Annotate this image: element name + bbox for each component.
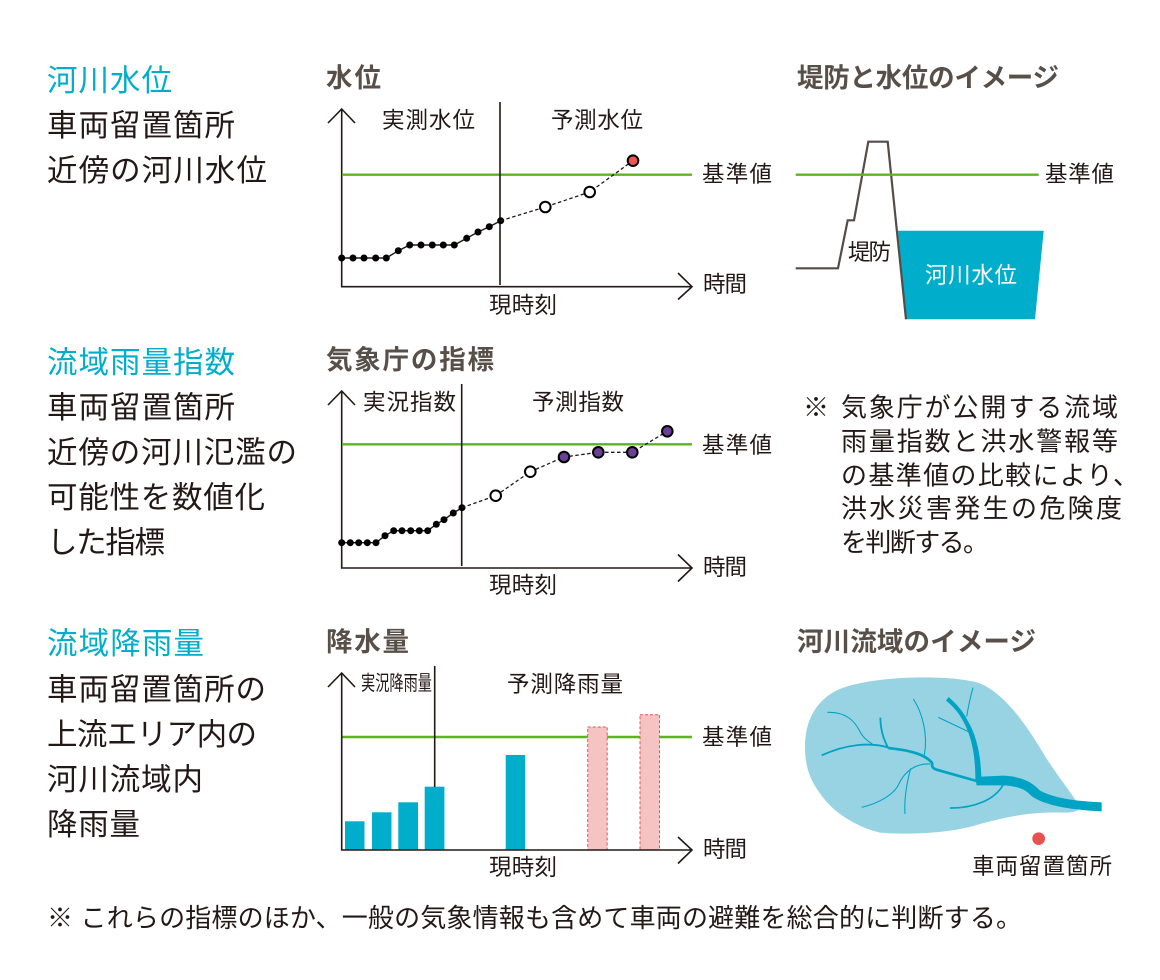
basin area bbox=[805, 677, 1079, 834]
note line 3: の基準値の比較により、 bbox=[841, 460, 1139, 490]
text: description line 2: 上流エリア内の bbox=[47, 718, 257, 752]
note mark: ※ bbox=[803, 392, 829, 422]
text: description line 1: 車両留置箇所 bbox=[47, 109, 235, 143]
heading: precipitation: 降水量 bbox=[326, 627, 409, 657]
chart axes bbox=[328, 673, 692, 864]
text: description line 3: 可能性を数値化 bbox=[47, 481, 265, 515]
note line 5: を判断する。 bbox=[841, 528, 989, 558]
label: forecast: 予測水位 bbox=[551, 108, 643, 133]
label: time axis: 時間 bbox=[703, 837, 747, 862]
label: forecast rainfall: 予測降雨量 bbox=[507, 672, 623, 697]
label: observed: 実測水位 bbox=[382, 108, 475, 133]
heading: water level: 水位 bbox=[326, 63, 381, 93]
chart axes bbox=[328, 109, 692, 300]
heading: river water level: 河川水位 bbox=[47, 64, 172, 98]
label: threshold: 基準値 bbox=[702, 725, 772, 750]
label: vehicle location: 車両留置箇所 bbox=[972, 854, 1112, 879]
current time line bbox=[461, 384, 463, 566]
text: description line 2: 近傍の河川水位 bbox=[47, 154, 267, 188]
note: JMA index explanation bbox=[803, 392, 1139, 558]
current time line bbox=[434, 666, 436, 787]
label: threshold: 基準値 bbox=[1045, 162, 1114, 187]
label: current time: 現時刻 bbox=[489, 573, 557, 598]
forecast series bbox=[462, 426, 673, 508]
panel: basin rainfall description bbox=[47, 627, 266, 842]
heading: basin rainfall index: 流域雨量指数 bbox=[47, 346, 235, 380]
label: threshold: 基準値 bbox=[702, 433, 772, 458]
vehicle location marker bbox=[1032, 832, 1045, 845]
observed series bbox=[338, 504, 466, 546]
panel: river basin image bbox=[797, 627, 1112, 879]
label: forecast index: 予測指数 bbox=[532, 390, 624, 415]
basin map bbox=[805, 677, 1102, 845]
heading: levee image: 堤防と水位のイメージ bbox=[797, 63, 1059, 93]
text: description line 3: 河川流域内 bbox=[47, 763, 203, 797]
label: threshold: 基準値 bbox=[702, 162, 772, 187]
chart axes bbox=[328, 391, 692, 582]
river network bbox=[822, 688, 1102, 814]
text: description line 2: 近傍の河川氾濫の bbox=[47, 436, 297, 470]
panel: levee and water level image bbox=[796, 63, 1114, 319]
heading: JMA index: 気象庁の指標 bbox=[326, 345, 494, 375]
panel: basin rainfall index description bbox=[47, 346, 297, 560]
panel: JMA index chart bbox=[326, 345, 772, 598]
text: description line 1: 車両留置箇所の bbox=[47, 673, 266, 707]
water body bbox=[898, 231, 1044, 319]
note line 1: 気象庁が公開する流域 bbox=[841, 392, 1118, 422]
forecast series bbox=[501, 155, 638, 221]
text: description line 4: 降雨量 bbox=[47, 808, 140, 842]
observed and forecast rain bars bbox=[345, 755, 525, 850]
note line 4: 洪水災害発生の危険度 bbox=[841, 494, 1122, 524]
threshold line bbox=[342, 736, 692, 738]
threshold line bbox=[342, 173, 692, 176]
current time line bbox=[499, 102, 501, 285]
text: description line 4: した指標 bbox=[47, 526, 165, 560]
threshold line bbox=[342, 443, 692, 445]
bars exceeding the threshold bbox=[588, 715, 660, 850]
threshold line bbox=[796, 173, 1039, 176]
label: water level: 河川水位 bbox=[925, 263, 1017, 288]
label: observed rainfall: 実況降雨量 bbox=[361, 672, 432, 695]
label: current time: 現時刻 bbox=[489, 293, 557, 318]
heading: river basin image: 河川流域のイメージ bbox=[797, 627, 1036, 657]
observed series bbox=[338, 217, 504, 262]
footnote: ※ これらの指標のほか、一般の気象情報も含めて車両の避難を総合的に判断する。 bbox=[47, 903, 1022, 933]
note line 2: 雨量指数と洪水警報等 bbox=[841, 426, 1118, 456]
label: time axis: 時間 bbox=[703, 272, 747, 297]
panel: river water level description bbox=[47, 64, 267, 188]
label: time axis: 時間 bbox=[703, 555, 747, 580]
label: observed index: 実況指数 bbox=[363, 390, 456, 415]
text: description line 1: 車両留置箇所 bbox=[47, 391, 235, 425]
label: current time: 現時刻 bbox=[489, 855, 557, 880]
panel: water level chart bbox=[326, 63, 772, 318]
panel: precipitation chart bbox=[326, 627, 772, 880]
levee outline bbox=[796, 142, 906, 319]
heading: basin rainfall: 流域降雨量 bbox=[47, 627, 204, 661]
label: levee: 堤防 bbox=[848, 240, 891, 265]
